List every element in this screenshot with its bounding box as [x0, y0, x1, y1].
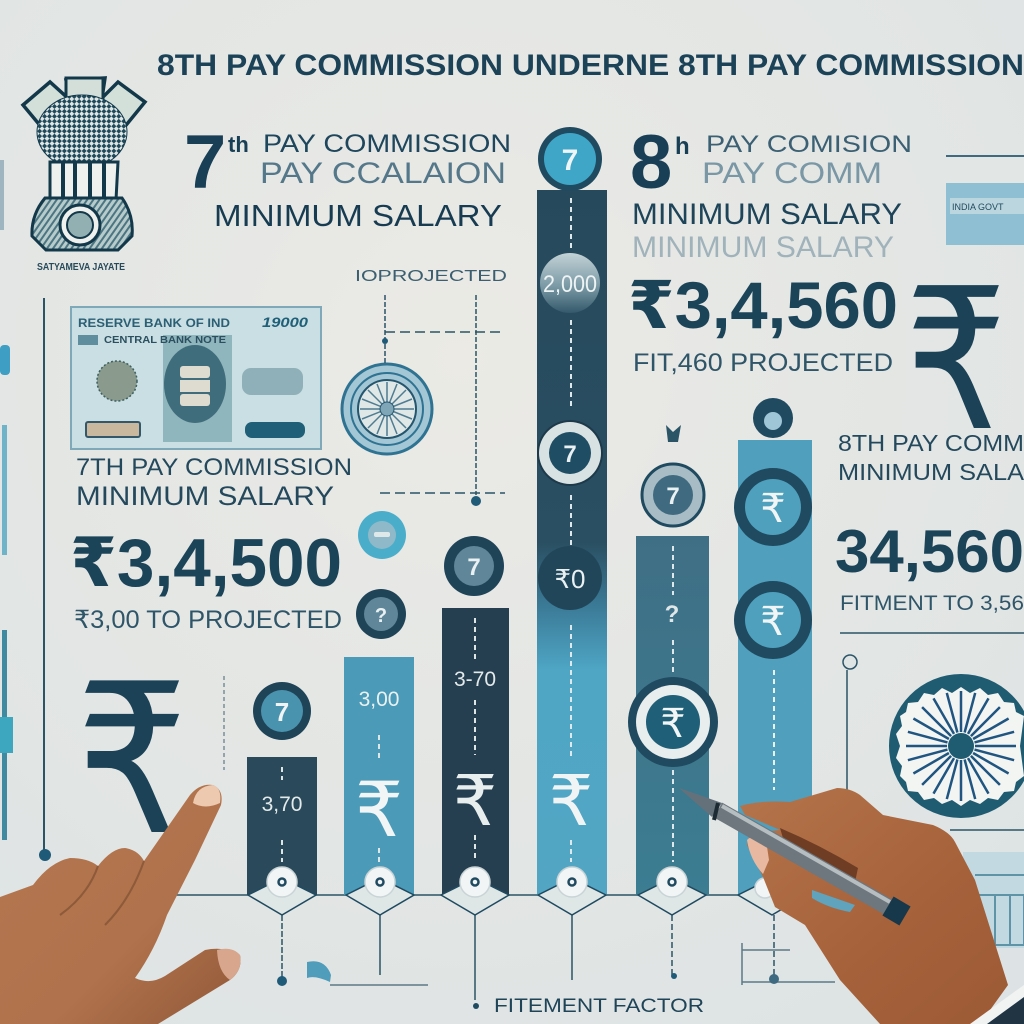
heading: 7th pay commission lower: 7TH PAY COMMISSION	[76, 454, 352, 481]
heading: 7th pay commission: PAY CCALAION	[260, 157, 506, 190]
value: 8th salary: ₹3,4,560	[628, 268, 898, 342]
value: 7th salary	[70, 525, 342, 634]
heading: 8th pay right: 8TH PAY COMM	[838, 430, 1024, 456]
value: 7th salary: ₹3,4,500	[70, 525, 342, 601]
value: 34,560 right: 34,560	[835, 518, 1024, 585]
value: 34,560 right: FITMENT TO 3,56	[840, 592, 1024, 615]
chart: bar 2: 3,00	[359, 688, 399, 711]
card: top right banner: INDIA GOVT	[952, 202, 1004, 212]
heading: 8th pay commission	[630, 120, 912, 264]
heading: 8th pay right	[838, 430, 1024, 485]
connector lines	[39, 295, 1024, 1000]
banknote: 19000	[262, 314, 308, 330]
chart: bar 6: ₹	[760, 599, 786, 645]
icon: ashoka chakra	[889, 674, 1024, 818]
left edge details	[0, 160, 13, 840]
chart: bar 2: ₹	[355, 765, 403, 854]
chart: bar 1	[247, 682, 317, 895]
icon: wheel medallion	[342, 364, 432, 454]
chart: bar 1: 3,70	[262, 793, 302, 816]
value: 7th salary: ₹3,00 TO PROJECTED	[74, 606, 342, 634]
banknote: CENTRAL BANK NOTE	[104, 335, 226, 346]
label: projected: IOPROJECTED	[355, 268, 507, 285]
chart: bar 6	[734, 398, 812, 895]
icon: national emblem: SATYAMEVA JAYATE	[37, 262, 125, 273]
small pointer icon	[307, 961, 331, 982]
chart: bar 4 tallest: 7	[562, 144, 578, 177]
chart: bar 4 tallest: 7	[563, 441, 577, 468]
chart: bar 1: 7	[275, 697, 289, 727]
heading: 8th pay commission: PAY COMISION	[706, 131, 912, 158]
heading: 7th pay commission lower	[76, 454, 352, 511]
illustration: left hand	[0, 785, 241, 1024]
chart: bar 5: ₹	[660, 701, 686, 747]
value: 8th salary	[628, 268, 898, 377]
heading: 7th pay commission: MINIMUM SALARY	[214, 198, 502, 233]
chart: bar 5: 7	[666, 483, 680, 510]
value: 8th salary: FIT,460 PROJECTED	[633, 349, 893, 377]
heading: 8th pay commission: PAY COMM	[702, 157, 882, 190]
label: fitment factor: FITEMENT FACTOR	[494, 996, 704, 1017]
value: 34,560 right	[835, 518, 1024, 615]
heading: 7th pay commission	[184, 120, 511, 233]
chart: bar 3	[442, 536, 509, 895]
chart: bar 5	[628, 425, 718, 895]
icon: large rupee left: ₹	[76, 640, 188, 882]
heading: 7th pay commission lower: MINIMUM SALARY	[76, 481, 334, 511]
chart: bar 4 tallest: 2,000	[543, 271, 597, 298]
heading: 8th pay commission: 8	[630, 120, 672, 205]
heading: 7th pay commission: PAY COMMISSION	[263, 130, 511, 158]
chart: bar 6: ₹	[760, 486, 786, 532]
chart: bar 3: 7	[467, 554, 481, 581]
heading: 7th pay commission: th	[228, 132, 249, 157]
heading: 7th pay commission: 7	[184, 120, 226, 205]
chart: bar 3: ₹	[453, 760, 497, 842]
chart: bar 4 tallest	[537, 127, 607, 895]
heading: 8th pay commission: MINIMUM SALARY	[632, 231, 894, 264]
chart: bar 4 tallest: ₹	[549, 760, 593, 842]
heading: 8th pay right: MINIMUM SALA	[838, 459, 1024, 485]
chart: bar 3: 3-70	[454, 668, 496, 691]
icon: national emblem	[23, 78, 145, 273]
heading: 8th pay commission: h	[675, 133, 690, 160]
banknote: RESERVE BANK OF IND	[78, 316, 230, 330]
card: lower right document	[963, 852, 1024, 948]
title: 8TH PAY COMMISSION UNDERNE 8TH PAY COMMISSION	[157, 49, 1024, 82]
illustration: right hand with pen	[679, 788, 1024, 1024]
chart: bar 5: ?	[665, 601, 679, 628]
heading: 8th pay commission: MINIMUM SALARY	[632, 198, 902, 231]
chart: bar 4 tallest: ₹0	[554, 564, 586, 594]
banknote	[71, 307, 321, 449]
chart: base nodes	[248, 867, 806, 915]
chart: bar 2	[344, 511, 414, 895]
card: top right banner	[946, 155, 1024, 245]
chart: bar 2: ?	[375, 605, 387, 627]
